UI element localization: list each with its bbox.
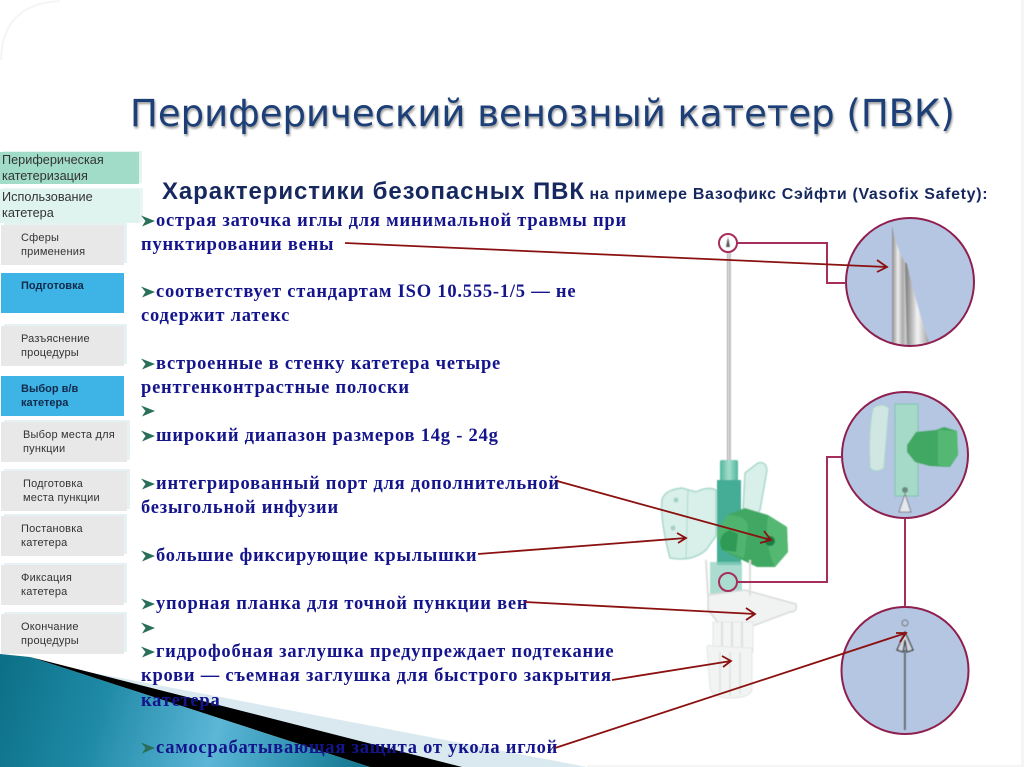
nav item: Постановка (21, 523, 83, 535)
feature list: встроенные в стенку катетера четыре (156, 354, 501, 374)
subheading: Характеристики безопасных ПВК на примере Вазофикс Сэйфти (Vasofix Safety): (162, 178, 988, 205)
feature list: рентгенконтрастные полоски (141, 378, 410, 398)
feature list: безыгольной инфузии (141, 498, 339, 518)
feature list: содержит латекс (141, 306, 290, 326)
callout arrows (345, 243, 906, 748)
right wing (742, 463, 767, 530)
feature list: гидрофобная заглушка предупреждает подтекание (156, 642, 614, 662)
connector lines (719, 234, 905, 607)
feature list: интегрированный порт для дополнительной (156, 474, 560, 494)
nav item: Выбор места для (23, 429, 115, 441)
nav item selected: катетера (21, 397, 68, 409)
nav item (1, 471, 127, 511)
feature list: самосрабатывающая защита от укола иглой (156, 738, 558, 758)
feature list: большие фиксирующие крылышки (156, 546, 477, 566)
nav item selected (1, 376, 124, 416)
nav item: Разъяснение (21, 333, 90, 345)
nav item selected (1, 273, 124, 313)
green tube (720, 460, 738, 484)
nav section: peripheral catheterization (0, 152, 139, 184)
nav item: места пункции (23, 492, 100, 504)
catheter diagram (344, 217, 975, 749)
zoom circle: needle guard (842, 607, 968, 734)
feature list: соответствует стандартам ISO 10.555-1/5 — не (156, 282, 576, 302)
nav item: применения (21, 246, 85, 258)
nav item (1, 326, 124, 366)
nav item (1, 422, 127, 462)
catheter body (662, 237, 796, 698)
push tab (708, 590, 796, 627)
nav item: Фиксация (21, 572, 72, 584)
feature list: упорная планка для точной пункции вен (156, 594, 528, 614)
nav section: catheter use (0, 189, 140, 223)
nav item (1, 516, 124, 556)
nav section: catheter use: Использование (2, 190, 93, 204)
nav item: процедуры (21, 347, 79, 359)
zoom circle: needle tip (846, 218, 974, 350)
port cap (717, 508, 788, 567)
nav item: процедуры (21, 635, 79, 647)
left wing (662, 488, 716, 559)
feature list: крови — съемная заглушка для быстрого закрытия (141, 666, 612, 686)
nav item selected: Подготовка (21, 280, 84, 292)
nav item: катетера (21, 537, 67, 549)
feature list: широкий диапазон размеров 14g - 24g (156, 426, 499, 446)
nav item: катетера (21, 586, 67, 598)
nav item selected: Выбор в/в (21, 383, 78, 395)
nav section: peripheral catheterization: катетеризация (2, 169, 88, 183)
feature list: острая заточка иглы для минимальной травмы при (156, 211, 627, 231)
feature list (141, 211, 627, 758)
zoom circle: port (842, 392, 968, 518)
nav item (1, 565, 124, 605)
nav item: пункции (23, 443, 65, 455)
nav section: peripheral catheterization: Периферическая (2, 153, 104, 167)
nav item (1, 225, 124, 265)
title: Периферический венозный катетер (ПВК) (130, 92, 955, 135)
feature list: пунктировании вены (141, 235, 334, 255)
sidebar navigation (0, 151, 143, 223)
needle shaft (727, 252, 731, 462)
nav item: Окончание (21, 621, 79, 633)
nav item (1, 614, 124, 654)
hydrophobic plug (713, 622, 753, 652)
nav section: catheter use: катетера (2, 206, 54, 220)
nav item: Подготовка (23, 478, 83, 490)
nav item: Сферы (21, 232, 59, 244)
feature list: катетера (141, 691, 221, 711)
